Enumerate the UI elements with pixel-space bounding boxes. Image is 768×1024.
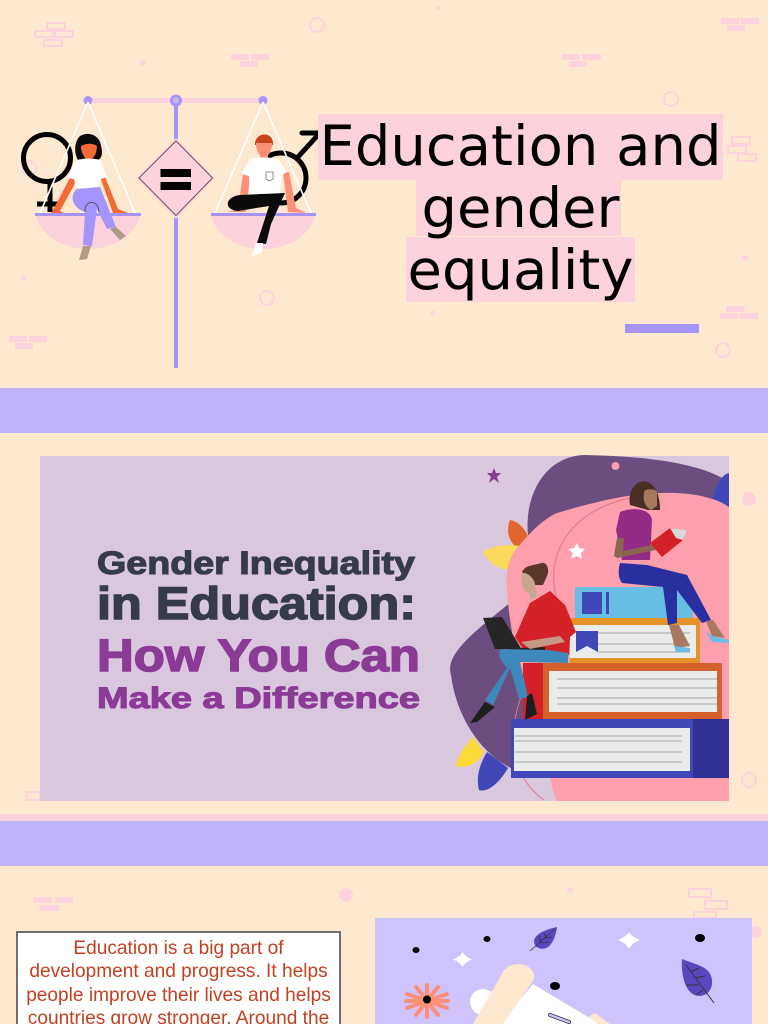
sparkles [453,932,640,967]
banner heading: in Education: [97,578,416,629]
icon: small leaf [530,927,557,951]
illustration: balance scale with woman and man [24,94,318,368]
text box: education intro: people improve their lives and helps [26,985,331,1006]
icon: female symbol [24,134,70,212]
book stack [511,587,729,778]
illustration: diploma scroll [470,964,610,1024]
top lavender band [0,388,768,433]
stars and dots [487,468,501,483]
icon: male symbol [256,133,318,203]
leaves [456,473,729,790]
icon: large leaf [682,959,714,1003]
title accent bar [625,324,699,333]
divider line [0,814,768,821]
banner heading: Gender Inequality [97,545,415,581]
title: Education and [320,114,722,178]
scale beam [84,94,268,368]
right pan [211,213,316,249]
illustration: women reading on books [450,455,729,801]
lower lavender band [0,821,768,866]
panel: gender inequality banner [40,455,729,801]
title [320,114,722,302]
banner heading [97,545,420,715]
figure: woman with laptop [470,563,576,723]
title: equality [408,238,634,302]
equals sign [136,138,215,219]
banner heading: Make a Difference [97,682,420,715]
figure: woman [51,134,128,260]
title: gender [422,176,620,240]
figure: woman reading [614,481,729,652]
text box: education intro: Education is a big part of [73,938,284,959]
text box: education intro: development and progress. It helps [29,961,328,982]
scale strings [40,102,311,213]
panel: lavender illustration [375,918,752,1024]
text box: education intro [16,931,341,1024]
figure: man [228,134,306,257]
icon: flower [406,985,448,1017]
left pan [35,213,141,249]
title highlight boxes [318,114,723,302]
banner heading: How You Can [97,630,420,681]
